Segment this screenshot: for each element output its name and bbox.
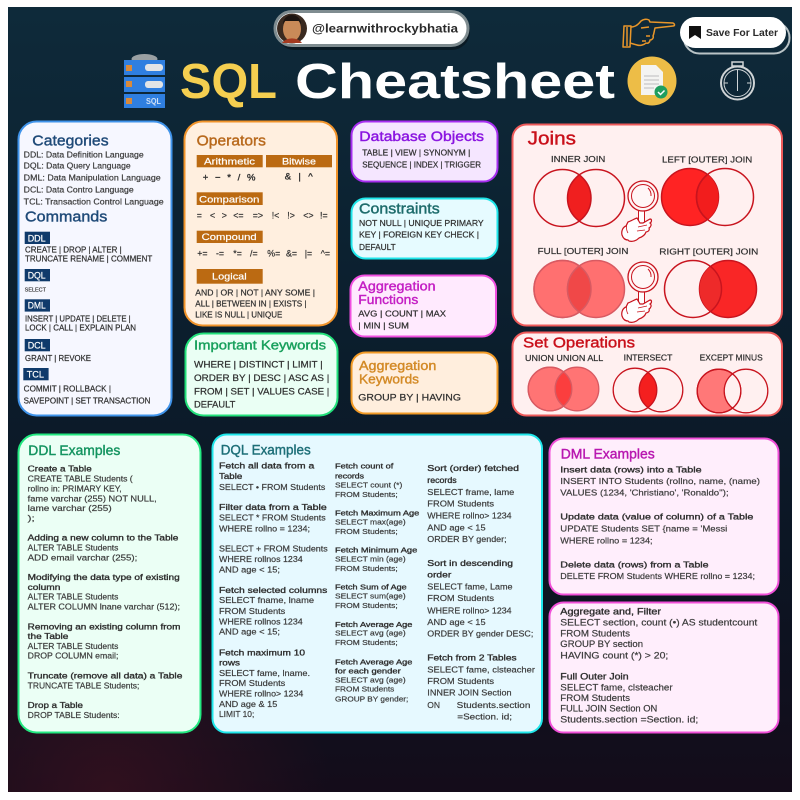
heading: DQL examples: DQL Examples xyxy=(221,441,311,457)
compound operators: %= xyxy=(267,248,280,258)
object list xyxy=(362,149,481,169)
category list: DDL: Data Definition Language xyxy=(24,150,144,159)
example: aggregate: SELECT section, count (•) AS studentcount xyxy=(560,618,758,628)
column 1 examples: Filter data from a Table xyxy=(219,502,327,512)
column 3 examples: Sort (order) fetched xyxy=(427,463,519,473)
column 3 examples: SELECT fame, Lame xyxy=(427,581,513,591)
compound operators: &= xyxy=(286,248,297,258)
tag: logical xyxy=(197,269,263,284)
column 1 examples: WHERE rollno = 1234; xyxy=(219,523,310,533)
example: delete: Delete data (rows) from a Table xyxy=(560,559,709,569)
column 1 examples: WHERE rollno> 1234 xyxy=(219,689,303,699)
heading: set operations: Set Operations xyxy=(523,334,635,351)
DDL commands xyxy=(25,245,153,264)
column 2 examples: for each gender xyxy=(335,667,401,676)
example: aggregate: HAVING count (*) > 20; xyxy=(560,650,668,660)
example: drop table: DROP TABLE Students: xyxy=(28,711,120,720)
example: truncate xyxy=(28,672,183,690)
example: add column: ADD email varchar (255); xyxy=(28,553,137,562)
handle pill xyxy=(275,12,470,50)
panel: categories and commands xyxy=(18,122,172,416)
example: modify column: column xyxy=(28,583,61,592)
panel: aggregation functions xyxy=(350,276,496,336)
join labels: FULL [OUTER] JOIN xyxy=(538,246,628,256)
example: modify column: Modifying the data type of existing xyxy=(28,573,180,582)
heading: DML examples: DML Examples xyxy=(561,445,655,461)
column 3 examples: WHERE rollno> 1234 xyxy=(427,605,512,615)
set operation labels: UNION UNION ALL xyxy=(525,354,604,363)
example: update: Update data (value of column) of a Table xyxy=(560,511,754,521)
example: modify column: ALTER TABLE Students xyxy=(28,593,118,602)
category list: DCL: Data Contro Language xyxy=(24,186,134,195)
heading: operators: Operators xyxy=(197,133,266,150)
keyword list: WHERE | DISTINCT | LIMIT | xyxy=(194,360,323,370)
example: update xyxy=(560,511,754,545)
column 1 examples: LIMIT 10; xyxy=(219,709,254,719)
example: full outer join: FULL JOIN Section ON xyxy=(560,704,657,714)
column 2 examples: Fetch Average Age xyxy=(335,657,412,666)
TCL commands: SAVEPOINT | SET TRANSACTION xyxy=(24,396,150,405)
icon: pointing hand xyxy=(623,19,674,47)
logical operators: LIKE IS NULL | UNIQUE xyxy=(195,311,282,320)
heading: categories: Categories xyxy=(32,133,109,150)
logical operators xyxy=(195,288,315,320)
example: create table: lame varchar (255) xyxy=(28,504,112,513)
tag: DCL: DCL xyxy=(28,340,46,351)
column 1 examples: FROM Students xyxy=(219,678,286,688)
example: full outer join: FROM Students xyxy=(560,693,631,703)
comparison operators: => xyxy=(253,210,263,220)
tag: DML: DML xyxy=(28,301,46,312)
bitwise operators: & | ^ xyxy=(285,171,313,182)
category list: TCL: Transaction Control Language xyxy=(24,197,164,206)
save label: Save For Later xyxy=(706,28,778,39)
TCL commands: COMMIT | ROLLBACK | xyxy=(24,385,111,394)
tag: DQL: DQL xyxy=(28,271,46,282)
join labels: RIGHT [OUTER] JOIN xyxy=(659,247,758,257)
comparison operators: !< xyxy=(272,210,279,220)
DQL commands: SELECT xyxy=(25,287,46,293)
comparison operators: < xyxy=(210,210,215,220)
column 1 examples: SELECT + FROM Students xyxy=(219,544,328,554)
heading: aggregation functions xyxy=(358,278,436,307)
column 2 examples: Fetch count of xyxy=(335,461,394,470)
example: truncate: TRUNCATE TABLE Students; xyxy=(28,681,139,690)
example: create table: CREATE TABLE Students ( xyxy=(28,475,133,484)
panel: DQL examples xyxy=(212,434,542,732)
panel: aggregation keywords xyxy=(352,352,498,414)
column 3 examples: INNER JOIN Section xyxy=(427,688,512,698)
column 2 examples: Fetch Minimum Age xyxy=(335,545,417,554)
column 2 examples: SELECT sum(age) xyxy=(335,592,406,601)
example: update: WHERE rollno = 1234; xyxy=(560,535,653,545)
icon: SQL database stack xyxy=(124,54,165,108)
handle text: @learnwithrockybhatia xyxy=(312,24,459,36)
column 1 examples: rows xyxy=(219,658,241,668)
example: insert: INSERT INTO Students (rollno, name, (name) xyxy=(560,476,760,486)
tag: DDL: DDL xyxy=(28,234,46,245)
example: add column: ALTER TABLE Students xyxy=(28,543,118,552)
tag: DCL xyxy=(25,339,50,351)
column 2 examples: FROM Students; xyxy=(335,490,398,499)
column 2 examples: Fetch Maximum Age xyxy=(335,508,419,517)
example: aggregate xyxy=(560,607,758,660)
example: create table: ); xyxy=(28,514,35,523)
column 3 examples: AND age < 15 xyxy=(427,522,486,532)
venn: full join xyxy=(534,260,624,318)
category list: DML: Data Manipulation Language xyxy=(24,174,161,183)
column 1 examples: WHERE rollnos 1234 xyxy=(219,616,303,626)
column 3 examples: ORDER BY gender; xyxy=(427,534,507,544)
constraint list xyxy=(359,219,484,252)
tag: DQL xyxy=(25,269,50,282)
heading: aggregation functions: Functions xyxy=(358,292,419,307)
heading: important keywords: Important Keywords xyxy=(194,337,327,352)
column 3 examples: ON xyxy=(427,700,440,710)
comparison operators: !> xyxy=(287,210,295,220)
panel: set operations xyxy=(512,332,782,416)
function list: AVG | COUNT | MAX xyxy=(358,310,447,319)
keyword list xyxy=(194,360,329,410)
example: delete: DELETE FROM Students WHERE rollno = 1234; xyxy=(560,571,755,581)
tag: TCL xyxy=(23,368,49,380)
venn: left join xyxy=(662,168,754,226)
column 3 examples: WHERE rollno> 1234 xyxy=(427,510,512,520)
example: create table: fame varchar (255) NOT NULL, xyxy=(28,495,157,504)
example: create table xyxy=(28,465,157,523)
heading: aggregation functions: Aggregation xyxy=(358,278,436,293)
panel: joins xyxy=(512,124,782,326)
heading: DDL examples: DDL Examples xyxy=(28,442,120,458)
keyword list: GROUP BY | HAVING xyxy=(358,392,461,402)
icon: document badge xyxy=(628,56,676,106)
comparison operators: <> xyxy=(303,210,314,220)
DML commands: LOCK | CALL | EXPLAIN PLAN xyxy=(25,324,136,333)
example: insert: Insert data (rows) into a Table xyxy=(560,464,702,474)
logical operators: ALL | BETWEEN IN | EXISTS | xyxy=(195,300,307,309)
example: create table: rollno in: PRIMARY KEY, xyxy=(28,485,122,494)
panel: operators xyxy=(184,122,337,326)
title: SQL xyxy=(180,55,277,109)
keyword list: DEFAULT xyxy=(194,400,236,410)
function list xyxy=(358,310,447,330)
column 3 examples: order xyxy=(427,570,451,580)
comparison operators: > xyxy=(222,210,227,220)
column 2 examples: FROM Students; xyxy=(335,638,398,647)
example: full outer join xyxy=(560,672,698,725)
column 3 examples: Fetch from 2 Tables xyxy=(427,653,517,663)
button: save for later xyxy=(680,17,790,54)
example: add column: Adding a new column to the Table xyxy=(28,534,179,543)
column 2 examples: FROM Students; xyxy=(335,601,398,610)
example: aggregate: GROUP BY section xyxy=(560,639,643,649)
DCL commands: GRANT | REVOKE xyxy=(25,354,91,363)
example: remove column xyxy=(28,622,181,661)
column 1 examples: SELECT fame, lname. xyxy=(219,668,310,678)
example: truncate: Truncate (remove all data) a Table xyxy=(28,672,183,681)
DML commands: INSERT | UPDATE | DELETE | xyxy=(25,314,131,323)
tag: bitwise xyxy=(266,155,332,167)
category list xyxy=(24,150,164,206)
column 2 examples: SELECT min (age) xyxy=(335,555,406,564)
venn: right join xyxy=(664,260,756,318)
panel: important keywords xyxy=(186,334,338,416)
example: full outer join: Students.section =Section. id; xyxy=(560,715,698,725)
column 1 examples: Table xyxy=(219,471,242,481)
keyword list: FROM | SET | VALUES CASE | xyxy=(194,386,329,396)
column 1 examples: SELECT • FROM Students xyxy=(219,482,326,492)
DML commands xyxy=(25,314,136,333)
venn: inner join xyxy=(534,170,624,226)
column 1 examples: Fetch selected columns xyxy=(219,585,328,595)
icon: SQL database stack: SQL xyxy=(146,97,161,106)
example: create table: Create a Table xyxy=(28,465,92,474)
example: insert xyxy=(560,464,760,498)
heading: aggregation keywords: Aggregation xyxy=(359,358,436,373)
column 3 examples: FROM Students xyxy=(427,499,495,509)
tag: comparison: Comparison xyxy=(199,194,259,205)
set operation labels xyxy=(525,353,763,363)
example: drop table xyxy=(28,701,120,720)
example: insert: VALUES (1234, 'Christiano', 'Ronaldo''); xyxy=(560,488,729,498)
column 3 examples: Sort in descending xyxy=(427,558,513,568)
example: remove column: ALTER TABLE Students xyxy=(28,642,118,651)
tag: DDL xyxy=(25,232,50,245)
column 3 examples: SELECT frame, lame xyxy=(427,487,514,497)
panel: constraints xyxy=(352,198,498,258)
icon: avatar xyxy=(277,14,307,44)
compound operators: |= xyxy=(305,248,312,258)
comparison operators: <= xyxy=(233,210,244,220)
icon: magnifier with hand xyxy=(622,262,658,322)
example: modify column xyxy=(28,573,180,612)
compound operators: += xyxy=(197,248,208,258)
tag: compound xyxy=(197,231,263,243)
arithmetic operators: + − * / % xyxy=(203,173,256,184)
heading: database objects: Database Objects xyxy=(359,129,484,144)
column 2 examples: FROM Students; xyxy=(335,527,398,536)
TCL commands xyxy=(24,385,150,405)
panel: database objects xyxy=(352,122,498,182)
column 2 examples: records xyxy=(335,471,364,480)
set operation labels: EXCEPT MINUS xyxy=(700,353,763,362)
column 1 examples: WHERE rollnos 1234 xyxy=(219,554,303,564)
column 1 examples: Fetch maximum 10 xyxy=(219,648,305,658)
function list: | MIN | SUM xyxy=(358,321,409,330)
object list: TABLE | VIEW | SYNONYM | xyxy=(362,149,470,158)
column 3 examples: =Section. id; xyxy=(457,711,512,721)
column 3 examples: Students.section xyxy=(457,700,531,710)
heading: constraints: Constraints xyxy=(359,202,440,218)
heading: commands: Commands xyxy=(25,209,107,226)
join labels: INNER JOIN xyxy=(551,154,605,164)
column 2 examples: SELECT avg (age) xyxy=(335,675,406,684)
tag: bitwise: Bitwise xyxy=(282,156,316,167)
join labels: LEFT [OUTER] JOIN xyxy=(662,155,752,165)
constraint list: KEY | FOREIGN KEY CHECK | xyxy=(359,231,479,240)
example: drop table: Drop a Table xyxy=(28,701,84,710)
column 3 examples xyxy=(427,463,535,721)
column 2 examples: SELECT count (*) xyxy=(335,481,403,490)
venn: union xyxy=(528,367,599,411)
column 1 examples: AND age & 15 xyxy=(219,699,277,709)
tag: arithmetic xyxy=(197,155,263,167)
keyword list: ORDER BY | DESC | ASC AS | xyxy=(194,373,329,383)
column 3 examples: FROM Students xyxy=(427,676,495,686)
column 1 examples: AND age < 15; xyxy=(219,565,280,575)
column 3 examples: AND age < 15 xyxy=(427,617,486,627)
icon: stopwatch xyxy=(721,62,754,100)
object list: SEQUENCE | INDEX | TRIGGER xyxy=(362,160,481,169)
column 1 examples: SELECT fname, lname xyxy=(219,595,314,605)
join labels xyxy=(538,154,758,257)
example: aggregate: FROM Students xyxy=(560,628,631,638)
column 1 examples: Fetch all data from a xyxy=(219,461,314,471)
panel: DDL examples xyxy=(18,434,200,732)
constraint list: DEFAULT xyxy=(359,243,396,252)
title xyxy=(180,55,615,109)
column 2 examples: SELECT max(age) xyxy=(335,518,406,527)
column 3 examples: records xyxy=(427,475,457,485)
example: full outer join: SELECT fame, clsteacher xyxy=(560,682,673,692)
compound operators: -= xyxy=(216,248,224,258)
panel: DML examples xyxy=(550,438,778,594)
column 2 examples: Fetch Sum of Age xyxy=(335,582,407,591)
column 3 examples: ORDER BY gender DESC; xyxy=(427,629,533,639)
compound operators: *= xyxy=(233,248,242,258)
tag: compound: Compound xyxy=(202,232,257,243)
heading: joins: Joins xyxy=(528,128,576,148)
example: remove column: DROP COLUMN email; xyxy=(28,652,118,661)
example: add column xyxy=(28,534,179,562)
example: aggregate: Aggregate and, Filter xyxy=(560,607,661,617)
column 1 examples: AND age < 15; xyxy=(219,627,280,637)
column 2 examples: FROM Students; xyxy=(335,564,398,573)
icon: magnifier with hand xyxy=(622,181,658,241)
example: full outer join: Full Outer Join xyxy=(560,672,629,682)
column 2 examples: SELECT avg (age) xyxy=(335,629,406,638)
compound operators: ^= xyxy=(321,248,330,258)
tag: comparison xyxy=(197,192,263,205)
column 3 examples: SELECT fame, clsteacher xyxy=(427,664,535,674)
example: remove column: Removing an existing column from xyxy=(28,622,181,631)
column 2 examples: FROM Students xyxy=(335,685,395,694)
compound operators: /= xyxy=(250,248,258,258)
column 2 examples: Fetch Average Age xyxy=(335,620,412,629)
example: delete xyxy=(560,559,755,581)
constraint list: NOT NULL | UNIQUE PRIMARY xyxy=(359,219,484,228)
icon: bookmark xyxy=(689,26,701,39)
heading: aggregation keywords: Keywords xyxy=(359,372,420,387)
DDL commands: TRUNCATE RENAME | COMMENT xyxy=(25,255,153,264)
comparison operators: = xyxy=(197,210,202,220)
column 2 examples xyxy=(335,461,419,703)
category list: DQL: Data Query Language xyxy=(24,162,131,171)
tag: arithmetic: Arithmetic xyxy=(204,156,255,167)
column 1 examples: FROM Students xyxy=(219,606,286,616)
comparison operators: != xyxy=(320,210,328,220)
tag: logical: Logical xyxy=(212,271,247,282)
title: Cheatsheet xyxy=(295,55,615,109)
example: remove column: the Table xyxy=(28,632,69,641)
DDL commands: CREATE | DROP | ALTER | xyxy=(25,245,122,254)
venn: intersect xyxy=(613,368,683,412)
panel: aggregate and full outer join xyxy=(550,602,778,732)
set operation labels: INTERSECT xyxy=(624,353,673,362)
venn: except xyxy=(697,369,768,413)
tag: TCL: TCL xyxy=(27,369,44,380)
column 1 examples: SELECT * FROM Students xyxy=(219,513,326,523)
column 3 examples: FROM Students xyxy=(427,593,495,603)
heading: aggregation keywords xyxy=(359,358,436,387)
column 1 examples xyxy=(219,461,328,719)
column 2 examples: GROUP BY gender; xyxy=(335,694,408,703)
logical operators: AND | OR | NOT | ANY SOME | xyxy=(195,288,315,297)
example: modify column: ALTER COLUMN lnane varchar (512); xyxy=(28,603,180,612)
example: update: UPDATE Students SET {name = 'Messi xyxy=(560,524,727,534)
